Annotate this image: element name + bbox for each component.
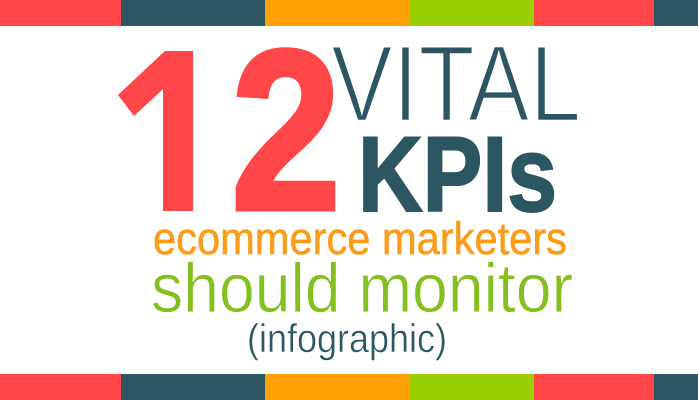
note: (infographic): (infographic) <box>247 317 447 361</box>
top colour bar <box>0 0 698 26</box>
numeral 2: 2 <box>231 4 341 258</box>
subheading: should monitor: should monitor <box>151 249 573 327</box>
heading: VITAL: VITAL <box>331 23 581 145</box>
numeral 1: 1 <box>95 2 220 261</box>
subheading: ecommerce marketers: ecommerce marketers <box>153 213 567 264</box>
heading: KPIs: KPIs <box>358 114 557 234</box>
bottom colour bar <box>0 374 698 400</box>
